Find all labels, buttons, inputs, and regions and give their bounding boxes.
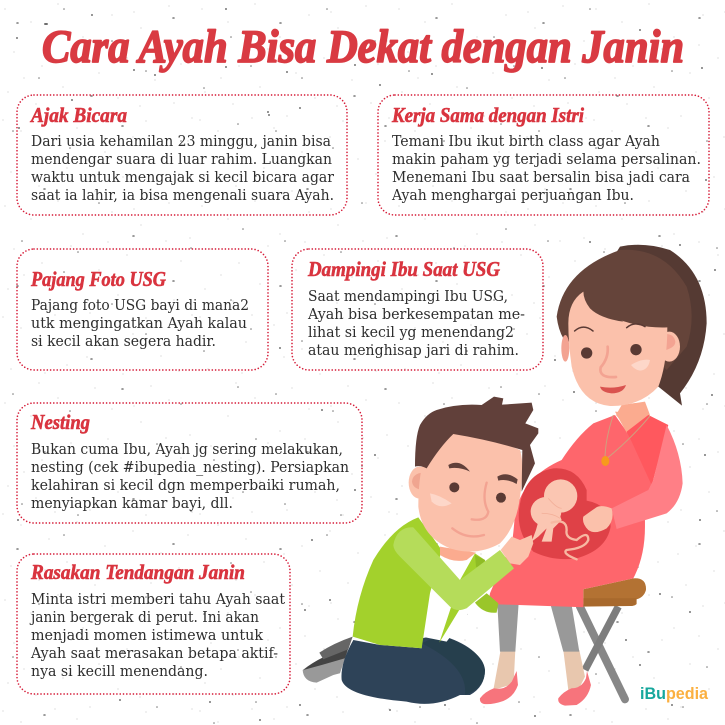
text block: Rasakan: menjadi momen istimewa untuk [31,626,264,644]
text block: Kerja Sama: Ayah menghargai perjuangan Ibu. [391,186,634,204]
illustration: mother head [557,245,707,432]
text block: Ajak Bicara: waktu untuk mengajak si kecil bicara agar [31,168,335,186]
panel: Rasakan Tendangan Janin [17,554,290,694]
heading: Rasakan Tendangan Janin: Rasakan Tendangan Janin [30,560,245,584]
text block: Kerja Sama: Temani Ibu ikut birth class agar Ayah [392,132,660,150]
text block: Nesting: Bukan cuma Ibu, Ayah jg sering melakukan, [31,440,343,458]
text block: Nesting: menyiapkan kamar bayi, dll. [31,494,233,512]
text block: Ajak Bicara: saat ia lahir, ia bisa mengenali suara Ayah. [31,186,334,204]
heading: Dampingi Ibu Saat USG: Dampingi Ibu Saat USG [307,257,500,281]
text block: Pajang Foto USG: Pajang foto USG bayi di mana2 [31,296,249,314]
womb and baby [519,468,613,559]
text block: Kerja Sama: makin paham yg terjadi selama persalinan. [392,150,701,168]
panel: Nesting [17,403,362,523]
text block: Dampingi: Ayah bisa berkesempatan me- [307,305,525,323]
text block: Rasakan: Ayah saat merasakan betapa aktif- [30,644,278,662]
heading: Pajang Foto USG: Pajang Foto USG [30,267,166,291]
text block: Rasakan [29,590,285,680]
text block: Pajang Foto USG [31,296,249,350]
father shirt and jacket [353,517,533,648]
heading: Ajak Bicara: Ajak Bicara [29,103,127,127]
text block: Ajak Bicara [31,132,335,204]
text block: Rasakan: nya si kecill menendang. [31,662,208,680]
text block: Dampingi: Saat mendampingi Ibu USG, [308,287,508,305]
text block: Dampingi: atau menghisap jari di rahim. [308,341,519,359]
text block: Ajak Bicara: mendengar suara di luar rahim. Luangkan [31,150,332,168]
stool [580,578,646,699]
mother dress [488,412,683,607]
text block: Rasakan: Minta istri memberi tahu Ayah saat [31,590,285,608]
text block: Nesting: nesting (cek #ibupedia_nesting). Persiapkan [31,458,349,476]
panel: Pajang Foto USG [17,249,268,370]
mother legs and shoes [480,603,591,706]
logo: ibupedia: iBupedia [640,684,709,703]
text block: Kerja Sama [391,132,701,204]
text block: Nesting: kelahiran si kecil dgn memperbaiki rumah, [31,476,340,494]
father pants and shoes [303,635,485,704]
text block: Kerja Sama: Menemani Ibu saat bersalin bisa jadi cara [392,168,690,186]
panel: Kerja Sama dengan Istri [378,95,709,215]
text block: Pajang Foto USG: utk mengingatkan Ayah kalau [31,314,247,332]
heading: Nesting: Nesting [30,410,90,434]
panel: Ajak Bicara [17,95,347,215]
text block: Nesting [31,440,349,512]
heading: Kerja Sama dengan Istri: Kerja Sama dengan Istri [391,103,584,127]
text block: Ajak Bicara: Dari usia kehamilan 23 minggu, janin bisa [31,132,331,150]
text block: Dampingi: lihat si kecil yg menendang2 [308,323,514,341]
illustration: mother and father with baby [303,397,683,706]
panel: Dampingi Ibu Saat USG [292,249,543,370]
text block: Dampingi [307,287,525,359]
text block: Rasakan: janin bergerak di perut. Ini akan [29,608,259,626]
father head [409,397,538,561]
text block: Pajang Foto USG: si kecil akan segera hadir. [31,332,216,350]
